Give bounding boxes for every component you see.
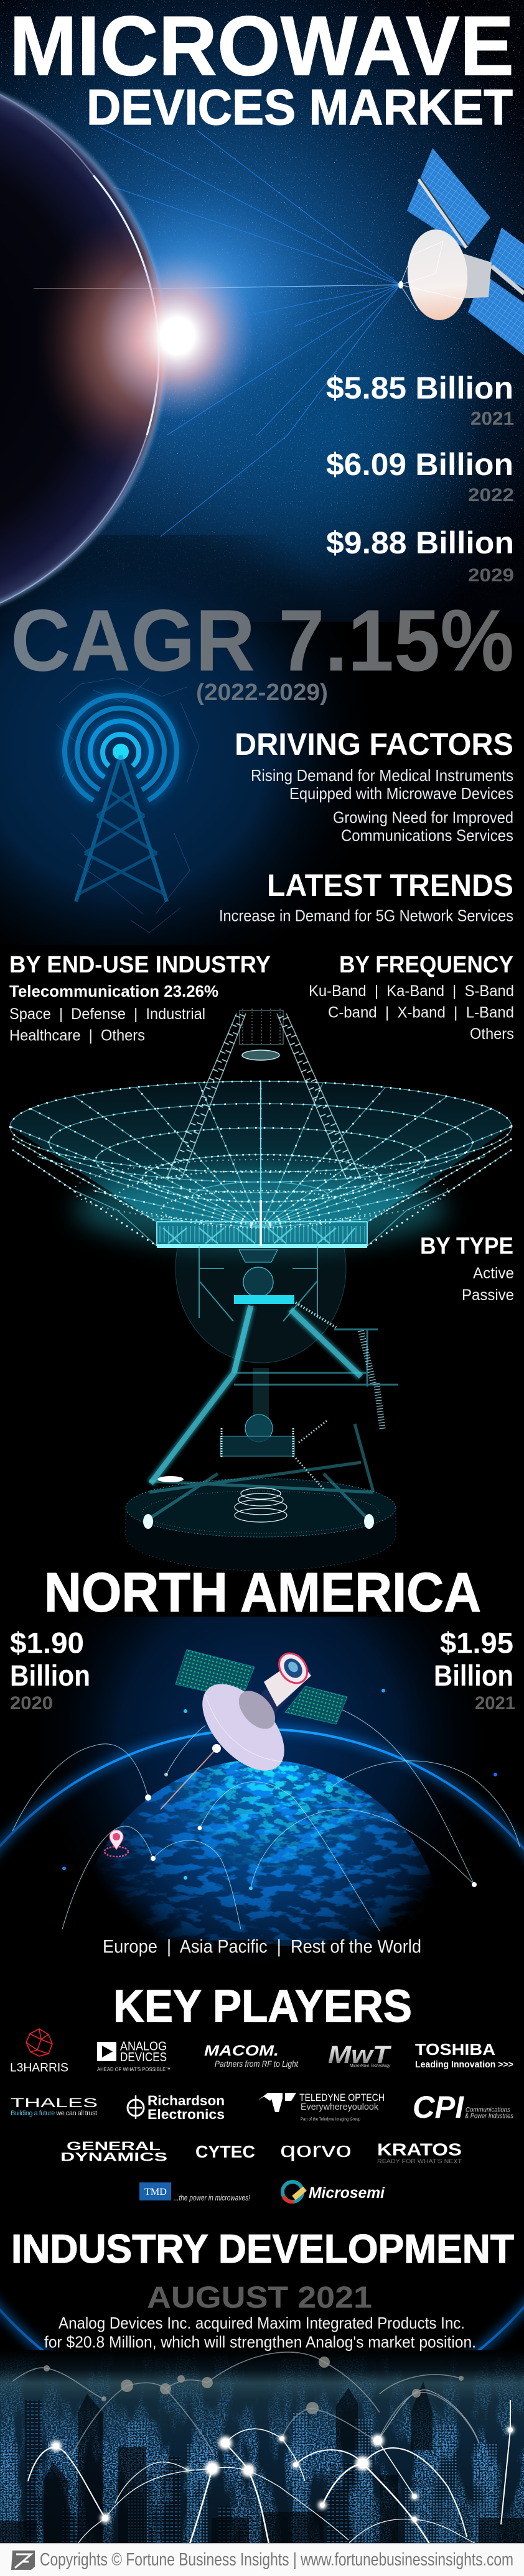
text block: north america: $1.95 <box>440 1627 513 1659</box>
panel: space hero background <box>0 0 524 945</box>
logo: CPI: Communications <box>466 2107 510 2114</box>
text block: north america: Europe | Asia Pacific | Rest of the World <box>103 1936 421 1957</box>
mount <box>147 1246 398 1520</box>
logo: Teledyne Optech: Everywhereyoulook <box>301 2102 378 2112</box>
text block: by frequency: Others <box>470 1025 514 1043</box>
text block: driving factors <box>235 727 513 844</box>
text block: by type <box>420 1234 514 1304</box>
logo: Kratos: READY FOR WHAT'S NEXT <box>377 2158 462 2164</box>
logo: Analog Devices: ANALOG <box>120 2039 167 2053</box>
dish base lattice <box>157 1082 367 1246</box>
logo: Microsemi: Microsemi <box>309 2184 385 2202</box>
icon: Fortune Business Insights logo <box>11 2551 35 2570</box>
icon: location pin <box>105 1830 128 1857</box>
logo: General Dynamics <box>60 2140 167 2164</box>
text block: north america: Billion <box>434 1659 513 1692</box>
logo: MACOM <box>204 2043 299 2069</box>
logo: Kratos: KRATOS <box>377 2140 462 2159</box>
text block: latest trends <box>219 868 513 925</box>
logo: CPI <box>413 2090 513 2125</box>
logo: Toshiba <box>415 2040 513 2070</box>
market size values: 2029 <box>468 565 514 586</box>
market size values: 2021 <box>470 409 514 429</box>
logo: Teledyne Optech <box>257 2092 385 2121</box>
logo: MACOM: MACOM. <box>204 2043 279 2059</box>
text block: north america <box>10 1561 515 1957</box>
text block: by frequency <box>309 952 514 1043</box>
CAGR: (2022-2029) <box>196 680 328 706</box>
text block: by end-use industry: Space | Defense | Industrial <box>9 1005 205 1023</box>
logo: TMD: ...the power in microwaves! <box>174 2193 250 2202</box>
logo: MwT: MwT <box>328 2041 392 2069</box>
logo: Thales <box>11 2096 98 2117</box>
text block: north america: Billion <box>10 1659 90 1692</box>
text block: latest trends: LATEST TRENDS <box>267 868 513 903</box>
logo: Qorvo: qorvo <box>280 2138 352 2162</box>
logo: Thales: Building a future we can all trust <box>11 2110 97 2117</box>
logo: Analog Devices: AHEAD OF WHAT'S POSSIBLE™ <box>97 2067 171 2072</box>
footer <box>0 2543 524 2576</box>
heading: title: DEVICES MARKET <box>87 80 513 136</box>
planet <box>0 90 168 608</box>
market size values: $5.85 Billion <box>326 371 513 405</box>
market size values: $9.88 Billion <box>326 525 514 560</box>
logo: Toshiba: Leading Innovation >>> <box>415 2059 513 2070</box>
logo: Analog Devices: DEVICES <box>120 2051 167 2064</box>
logo: Thales: THALES <box>11 2096 98 2110</box>
text block: north america: NORTH AMERICA <box>44 1561 481 1623</box>
icon: satellite with dish <box>175 1648 347 1785</box>
sun flare <box>100 252 255 420</box>
text block: north america: 2021 <box>475 1693 515 1714</box>
logo: Cytec: CYTEC <box>195 2142 255 2161</box>
text block: by frequency: Ku-Band | Ka-Band | S-Band <box>309 982 514 1000</box>
logo: L3Harris <box>10 2029 68 2074</box>
logo: CPI: & Power Industries <box>465 2113 513 2120</box>
logo: Kratos <box>377 2140 462 2164</box>
icon: satellite <box>398 148 524 355</box>
logo: General Dynamics: DYNAMICS <box>60 2151 167 2164</box>
logo: Analog Devices <box>97 2039 171 2072</box>
text block: by type: Active <box>473 1265 514 1282</box>
logo: Teledyne Optech: Part of the Teledyne Imaging Group <box>301 2117 360 2121</box>
panel: city network image <box>0 2350 524 2544</box>
market size values: 2022 <box>468 485 514 506</box>
text block: by end-use industry: BY END-USE INDUSTRY <box>9 952 271 978</box>
market size values: $6.09 Billion <box>326 447 513 482</box>
text block: industry development: for $20.8 Million, which will strengthen Analog's market position. <box>44 2333 476 2352</box>
icon: signal tower <box>56 678 199 933</box>
logo: MwT: MicroWave Technology <box>350 2064 391 2068</box>
logo: L3Harris: L3HARRIS <box>10 2062 68 2074</box>
bowl <box>10 1081 512 1246</box>
illustration: wireframe radio telescope <box>10 1009 512 1571</box>
text block: by type: Passive <box>462 1286 514 1304</box>
text block: by type: BY TYPE <box>420 1234 513 1260</box>
logo: Toshiba: TOSHIBA <box>415 2040 495 2059</box>
text block: driving factors: Communications Services <box>341 826 513 844</box>
logo: Richardson Electronics: Richardson <box>147 2093 225 2108</box>
logo: Richardson Electronics <box>128 2093 225 2122</box>
text block: by end-use industry: Healthcare | Others <box>9 1027 145 1045</box>
logo: Microsemi <box>283 2182 385 2202</box>
signal beams <box>100 127 400 537</box>
logo: Teledyne Optech: TELEDYNE OPTECH <box>299 2092 385 2103</box>
text block: industry development <box>11 2226 514 2352</box>
logo: CPI: CPI <box>413 2090 464 2125</box>
logo: Richardson Electronics: Electronics <box>147 2107 225 2122</box>
logo: MACOM: Partners from RF to Light <box>215 2059 299 2069</box>
logo: General Dynamics: GENERAL <box>67 2140 161 2153</box>
text block: industry development: INDUSTRY DEVELOPMENT <box>11 2226 514 2271</box>
feed tripod <box>167 1009 361 1178</box>
illustration: earth and regional panel <box>0 1617 524 2427</box>
logo: TMD: TMD <box>144 2187 167 2197</box>
panel: key player logos <box>10 2029 513 2202</box>
heading: key players: KEY PLAYERS <box>113 1981 412 2032</box>
text block: by frequency: BY FREQUENCY <box>339 952 513 978</box>
text block: by end-use industry: Telecommunication 23.26% <box>9 982 218 1000</box>
market size values <box>326 371 514 586</box>
logo: TMD <box>139 2182 250 2202</box>
text block: driving factors: DRIVING FACTORS <box>235 727 513 762</box>
text block: by frequency: C-band | X-band | L-Band <box>328 1004 514 1021</box>
text block: by end-use industry <box>9 952 271 1045</box>
heading: title <box>9 0 514 136</box>
text block: industry development: AUGUST 2021 <box>147 2281 372 2314</box>
text block: industry development: Analog Devices Inc. acquired Maxim Integrated Products Inc. <box>58 2314 465 2332</box>
text block: north america: 2020 <box>10 1693 53 1714</box>
text block: north america: $1.90 <box>10 1627 84 1659</box>
